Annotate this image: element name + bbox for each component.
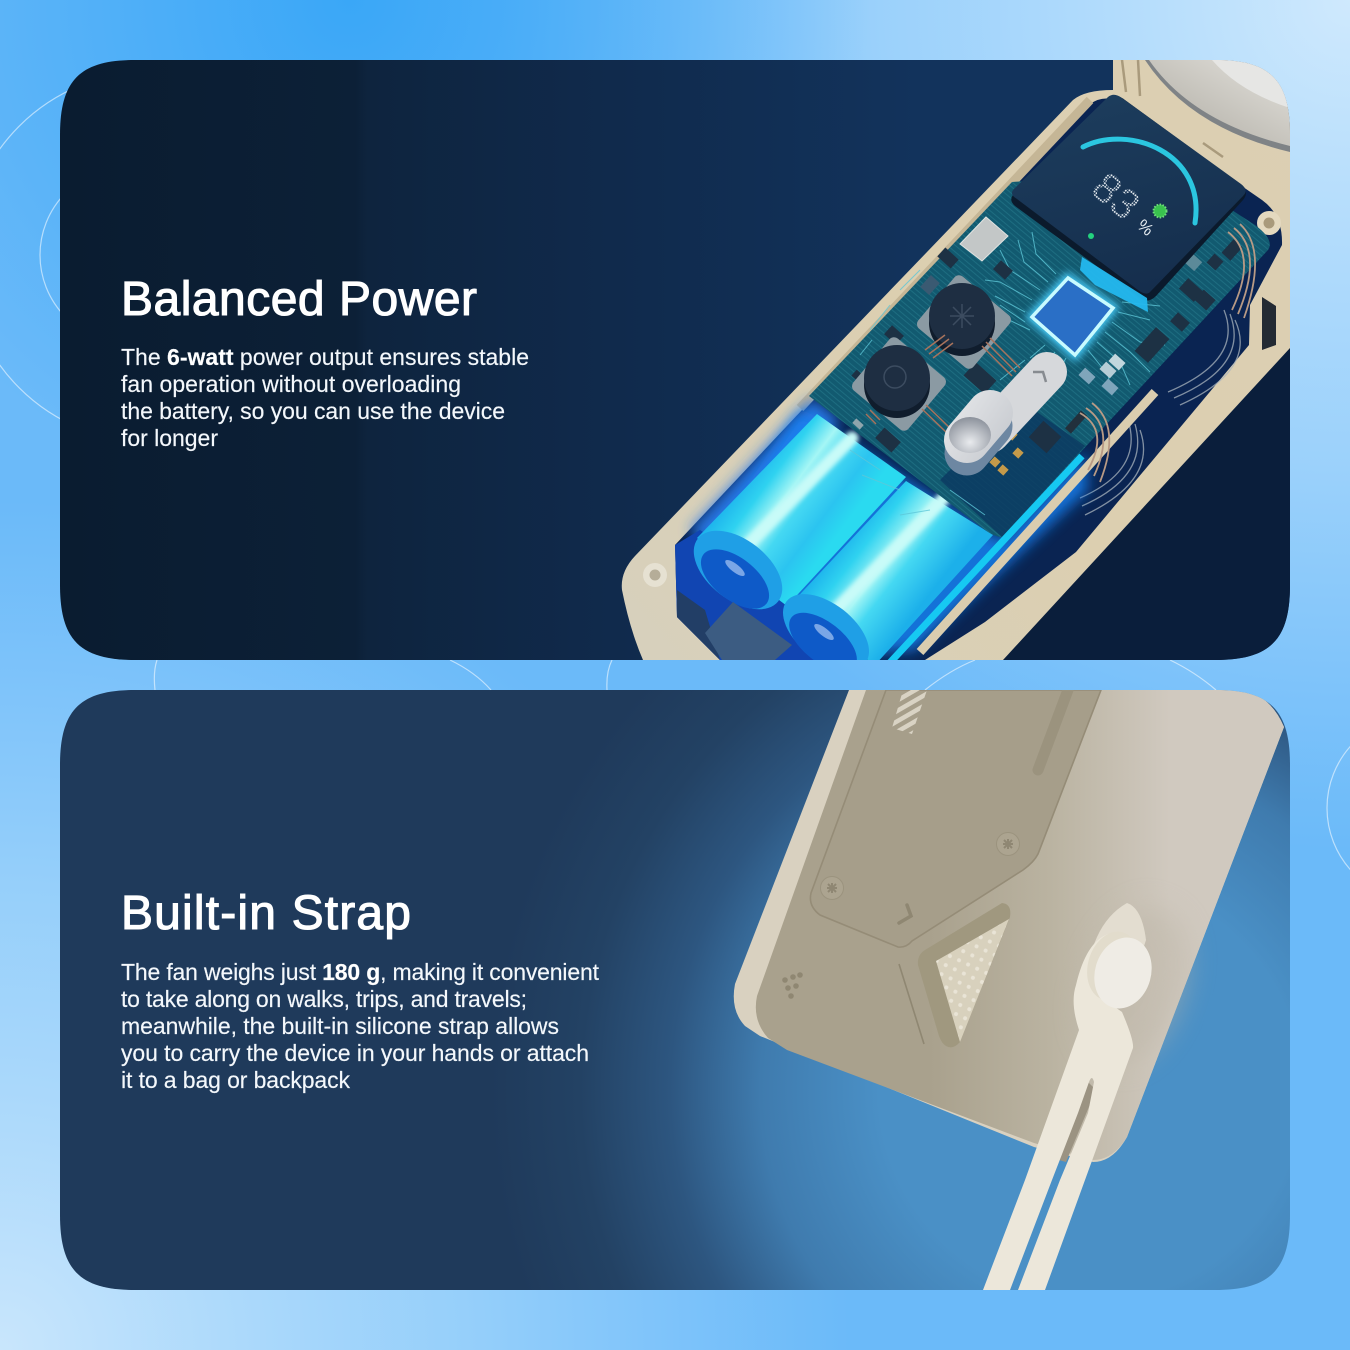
screws — [820, 832, 1020, 900]
strap gap shadow — [1052, 1082, 1096, 1162]
text: built-in strap description: it to a bag or backpack — [121, 1067, 350, 1093]
strap mount — [1085, 903, 1146, 1005]
battery terminal block — [705, 602, 792, 660]
text: built-in strap description: you to carry the device in your hands or attach — [121, 1040, 589, 1066]
panel: balanced power — [60, 60, 1290, 685]
glowing chip — [1032, 257, 1148, 355]
device body — [734, 690, 1284, 1162]
groove line — [899, 964, 924, 1044]
battery percent readout: % — [1133, 216, 1157, 240]
triangle recess — [918, 903, 1010, 1047]
text: built-in strap description: meanwhile, the built-in silicone strap allows — [121, 1013, 559, 1039]
logo dots — [782, 972, 803, 999]
slide switch — [949, 372, 1047, 453]
battery percent readout: 83 — [1083, 163, 1149, 229]
board components — [851, 239, 1242, 476]
back plate — [810, 690, 1101, 947]
text: balanced power description: the battery, so you can use the device — [121, 398, 505, 424]
battery percent readout — [1094, 174, 1153, 236]
circuit board — [809, 170, 1270, 537]
battery two — [783, 481, 993, 660]
text: built-in strap description: The fan weighs just 180 g, making it convenient — [121, 959, 600, 985]
hatch mark — [892, 690, 927, 734]
coils — [1080, 310, 1240, 515]
text: balanced power description: The 6-watt power output ensures stable — [121, 344, 529, 370]
product image: opened fan body with glowing electronics — [622, 60, 1290, 685]
text: balanced power description: for longer — [121, 425, 218, 451]
chip traces — [850, 232, 1165, 515]
blue glow — [690, 398, 840, 560]
device shell — [622, 60, 1290, 660]
title: Balanced Power: Balanced Power — [121, 273, 477, 326]
fan ring — [1122, 60, 1290, 157]
text: balanced power description: fan operation without overloading — [121, 371, 461, 397]
fan control button — [915, 273, 1013, 371]
strap peg — [1086, 931, 1160, 1015]
status display — [1011, 95, 1246, 301]
text: built-in strap description — [121, 959, 600, 1093]
plate slot — [1038, 690, 1068, 770]
text: balanced power description — [121, 344, 529, 451]
chevron mark — [899, 905, 911, 923]
battery one — [694, 414, 906, 610]
device cavity — [675, 98, 1282, 660]
inner rim — [920, 392, 1155, 652]
product image: fan back with strap — [734, 690, 1284, 1290]
battery level arc — [1083, 139, 1196, 223]
battery tray — [675, 530, 814, 660]
panel: built-in strap — [60, 690, 1290, 1290]
silicone strap — [983, 925, 1160, 1290]
back face — [756, 690, 1284, 1160]
ribbon wires — [1080, 224, 1255, 482]
usb port — [960, 217, 1008, 261]
status dot — [1088, 233, 1094, 239]
screw posts — [643, 211, 1281, 587]
cyan light strip — [885, 456, 1082, 668]
strap mount shadow — [1065, 894, 1205, 1076]
text: built-in strap description: to take along on walks, trips, and travels; — [121, 986, 527, 1012]
fan speed indicator — [1154, 204, 1166, 218]
title: Built-in Strap: Built-in Strap — [121, 887, 411, 940]
wire traces — [866, 335, 1020, 432]
power button — [850, 335, 948, 433]
